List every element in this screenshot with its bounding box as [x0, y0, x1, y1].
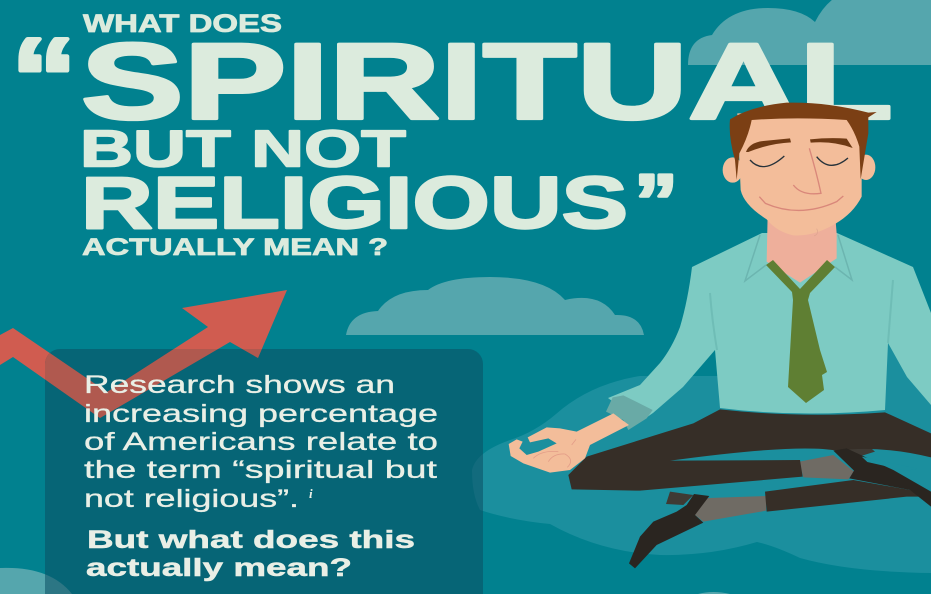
- title: BUT NOT: [80, 120, 406, 178]
- gap between crossed leg and shoe: [862, 457, 917, 471]
- cloud: bottom left: [0, 568, 72, 594]
- title: ACTUALLY MEAN ?: [82, 234, 388, 261]
- tie: [766, 260, 835, 403]
- cloud: middle: [346, 277, 644, 335]
- body paragraph: of Americans relate to: [84, 428, 438, 456]
- lower body: [509, 395, 931, 568]
- bold question: actually mean?: [86, 554, 352, 582]
- bold question: [86, 526, 415, 582]
- cloud: bottom centre: [698, 592, 730, 594]
- neck: [767, 213, 837, 283]
- title: [11, 10, 893, 261]
- body paragraph: not religious”.: [84, 485, 299, 513]
- body paragraph: increasing percentage: [84, 400, 438, 428]
- shirt collar: [745, 235, 852, 281]
- red rising arrow: [0, 290, 287, 418]
- title: RELIGIOUS: [81, 163, 628, 244]
- nose: [793, 148, 821, 194]
- body paragraph: Research shows an: [84, 371, 395, 399]
- face: [737, 113, 862, 235]
- closed eyes: [750, 156, 848, 167]
- head and neck: [723, 103, 877, 283]
- text panel: [45, 349, 483, 594]
- shoes: [629, 448, 931, 568]
- title: WHAT DOES: [83, 10, 282, 38]
- torso and arms: [608, 233, 931, 422]
- bold question: But what does this: [87, 526, 415, 554]
- arrow seen through panel: [45, 349, 262, 418]
- right heel: [842, 442, 875, 458]
- left shirt cuff: [606, 395, 653, 430]
- title: “: [11, 15, 77, 140]
- hand: [509, 413, 629, 473]
- lower heel: [666, 492, 693, 505]
- eyebrows: [746, 138, 853, 152]
- title: ”: [634, 159, 678, 244]
- body paragraph: the term “spiritual but: [84, 456, 437, 484]
- title: SPIRITUAL: [81, 20, 893, 142]
- body paragraph: i: [309, 486, 313, 501]
- trousers: [568, 409, 931, 512]
- hair: [730, 103, 877, 180]
- meditating man: [509, 103, 931, 568]
- socks: [695, 455, 854, 522]
- cloud: large behind man: [472, 340, 931, 573]
- ears: [723, 155, 875, 183]
- body paragraph: [84, 371, 438, 513]
- cloud: top right: [688, 0, 931, 65]
- chin crease: [814, 229, 818, 236]
- smile: [759, 196, 843, 210]
